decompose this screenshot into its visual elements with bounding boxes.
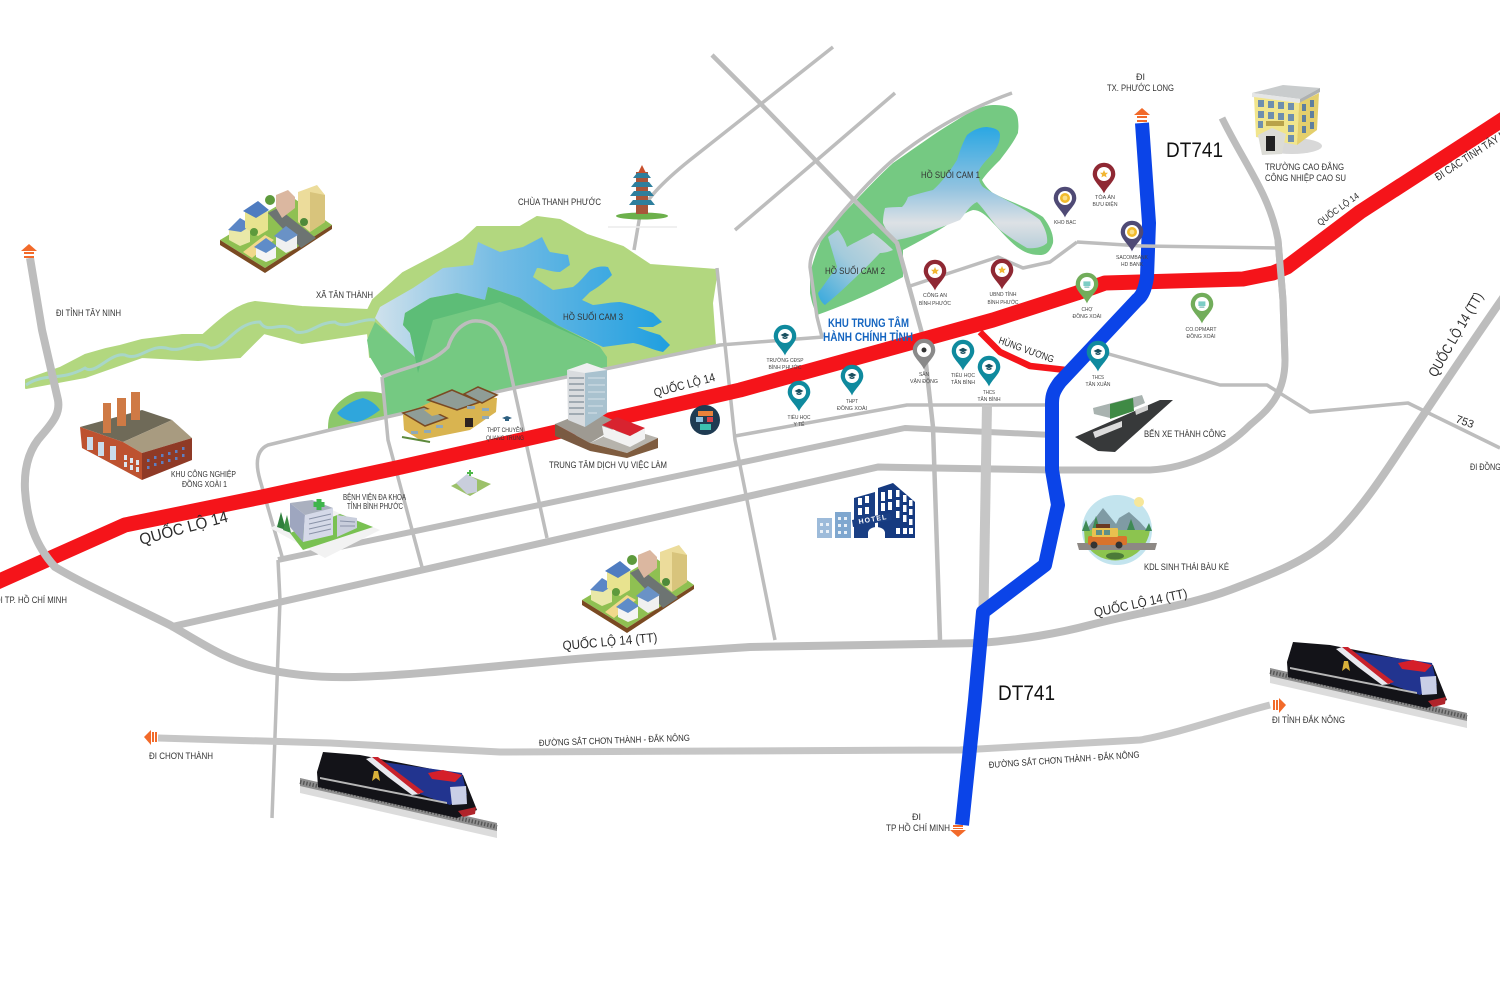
labels: place names: XÃ TÂN THÀNH [316, 290, 373, 300]
icon: Quang Trung cap [502, 416, 512, 421]
labels: place names: KHU CÔNG NGHIỆP [171, 470, 236, 479]
pin: Tiểu học Tân Bình [952, 340, 974, 370]
icon: Bàu Kế eco tourism [1077, 495, 1157, 565]
labels: place names: ĐI [1136, 72, 1145, 82]
labels: place names: TRƯỜNG CAO ĐẲNG [1265, 161, 1344, 172]
labels: road names along routes: ĐƯỜNG SẮT CHƠN THÀNH - ĐẮK NÔNG [988, 749, 1140, 770]
pin labels: ĐỒNG XOÀI [1072, 313, 1102, 320]
pin: Coopmart [1191, 293, 1213, 324]
road: vertical feeder [983, 405, 987, 640]
labels: place names: ĐI TỈNH ĐẮK NÔNG [1272, 714, 1345, 725]
label: heading Khu Trung Tâm Hành Chính Tỉnh: KHU TRUNG TÂM [828, 315, 909, 330]
medium green hill [367, 287, 607, 418]
labels: road names along routes [137, 119, 1500, 770]
pin labels: BÌNH PHƯỚC [988, 299, 1018, 306]
icon: Quang Trung high school [402, 387, 497, 442]
road: QL14 TT branch to east ring [170, 118, 1285, 627]
icon: train west [300, 752, 497, 838]
labels: place names: ĐI TỈNH TÂY NINH [56, 307, 121, 318]
labels: place names: TRUNG TÂM DỊCH VỤ VIỆC LÀM [549, 460, 667, 470]
pin: THPT Đồng Xoài [841, 365, 863, 396]
labels: place names: CHÙA THANH PHƯỚC [518, 197, 601, 207]
pin labels: TÂN XUÂN [1086, 381, 1110, 388]
pin labels: CHỢ [1082, 307, 1093, 313]
pin labels: KHO BẠC [1054, 220, 1076, 226]
labels: road names along routes: QUỐC LỘ 14 [137, 506, 230, 549]
labels: place names: THPT CHUYÊN [487, 426, 523, 434]
labels: place names: BẾN XE THÀNH CÔNG [1144, 429, 1226, 439]
pin labels: TÒA ÁN [1095, 194, 1115, 201]
labels: place names [0, 72, 1500, 833]
pin labels: Y TẾ [794, 421, 805, 428]
pin labels: THCS [1092, 375, 1104, 381]
pin labels: ĐỒNG XOÀI [1186, 333, 1216, 340]
arrow: to Chơn Thành [144, 730, 157, 745]
icon: tower and job centre [555, 363, 658, 458]
pin labels: THPT [846, 399, 858, 405]
pin labels: ĐỒNG XOÀI [837, 405, 867, 412]
labels: place names: ĐI [912, 812, 921, 822]
pin labels: BƯU ĐIỆN [1092, 200, 1118, 208]
labels: road names along routes: QUỐC LỘ 14 (TT) [1424, 289, 1486, 380]
labels: place names: HỒ SUỐI CAM 2 [825, 265, 885, 276]
icon: factory [80, 392, 192, 480]
pin: Chợ Đồng Xoài [1076, 273, 1098, 304]
local roads network [257, 47, 1500, 818]
arrow: to Phước Long [1134, 108, 1150, 122]
labels: place names: ĐỒNG XOÀI 1 [182, 479, 227, 489]
arrow: to Đắk Nông [1273, 698, 1286, 713]
icon: train east [1270, 642, 1467, 728]
labels: place names: TX. PHƯỚC LONG [1107, 83, 1174, 93]
park: Hồ Suối Cam 1 and 2 [810, 105, 1053, 315]
pin labels: SACOMBANK [1116, 255, 1148, 261]
icon: housing estate north [220, 185, 332, 273]
icon: college building [1252, 85, 1322, 155]
labels: place names: BỆNH VIỆN ĐA KHOA [343, 493, 407, 502]
labels: road names along routes: ĐƯỜNG SẮT CHƠN THÀNH - ĐẮK NÔNG [539, 733, 690, 748]
labels: road names along routes: QUỐC LỘ 14 [652, 369, 717, 400]
label: DT741 south: DT741 [998, 682, 1055, 705]
labels: place names: CÔNG NHIỆP CAO SU [1265, 173, 1346, 183]
pin: Trường CĐSP [774, 325, 796, 356]
road: DT741 blue [962, 123, 1149, 825]
pin labels: TIỂU HỌC [788, 414, 810, 421]
pin labels: TÂN BÌNH [951, 379, 975, 386]
pin: Tiểu học Y Tế [788, 381, 810, 412]
pin labels: HD BANK [1121, 262, 1143, 268]
labels: place names: QUANG TRUNG [486, 436, 524, 442]
pin: Tòa án [1093, 163, 1115, 194]
park green area [810, 105, 1053, 315]
icon: general hospital [270, 499, 380, 558]
pin: THCS Tân Xuân [1087, 341, 1109, 372]
icon: hotel: HOTEL [858, 514, 888, 526]
icon: housing estate south [582, 545, 694, 633]
pin labels: TIỂU HỌC [951, 372, 975, 379]
pin labels: UBND TỈNH [990, 291, 1016, 298]
labels: road names along routes: QUỐC LỘ 14 (TT) [562, 630, 658, 653]
icon: hotel [817, 483, 915, 538]
road: east ring over red [1278, 240, 1285, 360]
pin labels: THCS [983, 390, 995, 396]
light green hills and river valley [26, 217, 717, 388]
labels: road names along routes: QUỐC LỘ 14 (TT) [1093, 586, 1189, 620]
river line [26, 320, 375, 385]
icon: pagoda [608, 165, 677, 227]
label: heading Khu Trung Tâm Hành Chính Tỉnh [823, 315, 913, 344]
pin: UBND [991, 259, 1013, 290]
lake 2 [818, 230, 893, 305]
labels: place names: KDL SINH THÁI BÀU KÉ [1144, 562, 1229, 572]
labels: place names: HỒ SUỐI CAM 1 [921, 169, 980, 180]
pin labels: SÂN [919, 371, 929, 378]
label: heading Khu Trung Tâm Hành Chính Tỉnh: HÀNH CHÍNH TỈNH [823, 329, 913, 344]
road: Đường sắt Chơn Thành - Đắk Nông [158, 705, 1270, 752]
road: QL14 red [0, 118, 1500, 583]
dark green band [403, 287, 600, 373]
labels: road names along routes: HÙNG VƯƠNG [997, 334, 1056, 366]
icon: bus station [1075, 395, 1173, 452]
labels: place names: HỒ SUỐI CAM 3 [563, 311, 623, 322]
pin labels: BÌNH PHƯỚC [768, 364, 802, 371]
pin labels: TÂN BÌNH [978, 396, 1000, 403]
pond water [337, 398, 380, 422]
pin labels: TRƯỜNG CĐSP [766, 357, 804, 364]
labels: road names along routes: QUỐC LỘ 14 [1315, 190, 1361, 228]
pin: Sacombank [1121, 221, 1143, 252]
arrow: to TP Hồ Chí Minh [950, 825, 966, 837]
labels: place names: TỈNH BÌNH PHƯỚC [347, 502, 403, 511]
park: Hồ Suối Cam 3 river and hills [26, 217, 717, 418]
pin: THCS Tân Bình [978, 356, 1000, 386]
label: DT741 north: DT741 [1166, 139, 1223, 162]
labels: place names: TP HỒ CHÍ MINH [886, 822, 950, 833]
pin: Kho bạc [1054, 187, 1076, 218]
icon: job centre badge [690, 405, 720, 435]
labels: place names: ĐI CHƠN THÀNH [149, 751, 213, 761]
pin labels: VẬN ĐỘNG [910, 378, 938, 385]
road: cross street over blue [1077, 242, 1278, 248]
lake 1 [883, 127, 1047, 248]
pin: Công an [924, 260, 946, 290]
arrow: to Tây Ninh [21, 244, 37, 258]
pond banks [328, 391, 384, 430]
labels: road names along routes: 753 [1454, 414, 1475, 431]
pond [328, 391, 384, 430]
pin labels: CÔNG AN [923, 292, 947, 299]
road: left ring and QL14 TT [25, 258, 1500, 677]
pin: Sân vận động [913, 339, 935, 370]
icon: small hospital [451, 470, 491, 496]
pin labels: CO.OPMART [1186, 327, 1217, 333]
pin labels: BÌNH PHƯỚC [919, 300, 951, 307]
road: Hùng Vương [980, 332, 1066, 370]
pin labels [766, 194, 1217, 428]
lake 3 [375, 237, 670, 357]
